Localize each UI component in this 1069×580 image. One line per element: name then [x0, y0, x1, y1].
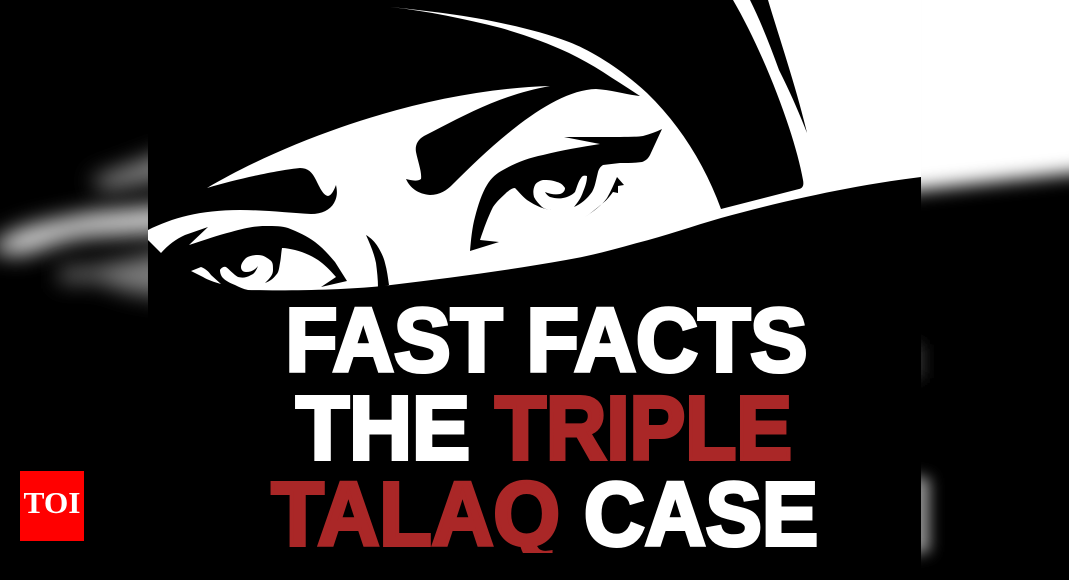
icon: right eye [470, 129, 662, 251]
title: line 2 [296, 379, 792, 479]
central poster panel [148, 0, 921, 580]
blurred background left [0, 150, 170, 298]
title: line 1: FAST [286, 291, 503, 391]
title: line 1 [286, 291, 808, 391]
title: line 2: THE [296, 379, 470, 479]
face and background white shape [148, 0, 921, 290]
blurred background right [900, 0, 1069, 555]
logo: TOI: TOI [24, 485, 80, 520]
title: line 2: TRIPLE [495, 379, 792, 479]
icon: right eye lash [585, 177, 624, 217]
icon: lash [366, 235, 389, 288]
title: line 3: TALAQ [272, 465, 560, 565]
title: line 3, second word: CASE [584, 465, 818, 565]
icon: left eye sliver [191, 267, 221, 284]
title: line 1: FACTS [526, 291, 808, 391]
icon: thin hood sliver [750, 0, 807, 133]
logo: TOI [20, 471, 84, 541]
icon: left eye [148, 226, 347, 295]
